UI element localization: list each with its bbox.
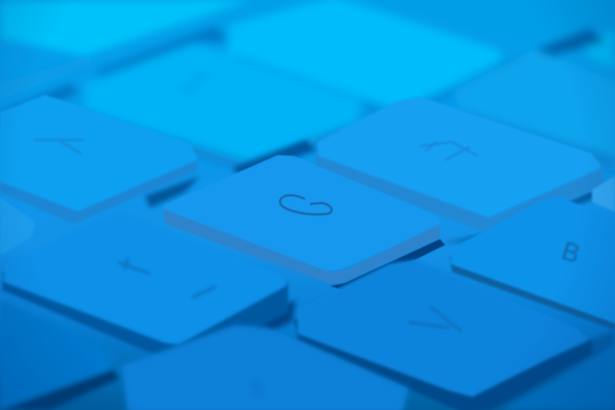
key: second row Z: [86, 50, 355, 172]
key: G: [163, 156, 445, 292]
back row keys: [0, 0, 615, 172]
key: small right edge: [592, 176, 615, 212]
middle row keys: [0, 98, 615, 330]
key: H: [316, 100, 604, 234]
letter: B: B: [558, 235, 584, 269]
letter: V: [408, 306, 462, 332]
key: second row right: [458, 56, 615, 172]
letter: F: [118, 258, 216, 298]
key: top left far: [0, 0, 250, 100]
key: T: [0, 98, 198, 224]
middle row shadows: [145, 140, 600, 244]
dark gap shadows, back row: [95, 26, 232, 84]
key: top right far: [360, 0, 615, 68]
key: F: [2, 216, 288, 362]
front row shadows: [190, 300, 615, 410]
front row keys: [2, 216, 592, 410]
bottom row keys: [0, 300, 615, 410]
key: bottom right: [500, 350, 615, 410]
key: left edge small: [0, 197, 35, 254]
key: bottom centre: [125, 328, 405, 410]
key: B: [450, 200, 615, 330]
letter: Z legend: Z: [175, 66, 216, 100]
letter: G: [280, 195, 332, 214]
key: bottom centre: S: [250, 376, 265, 401]
key: bottom left: [0, 300, 120, 410]
key: V: [294, 262, 592, 410]
letter: H: [420, 142, 478, 160]
key: second row centre: [234, 4, 495, 122]
letter: T: [34, 140, 84, 154]
